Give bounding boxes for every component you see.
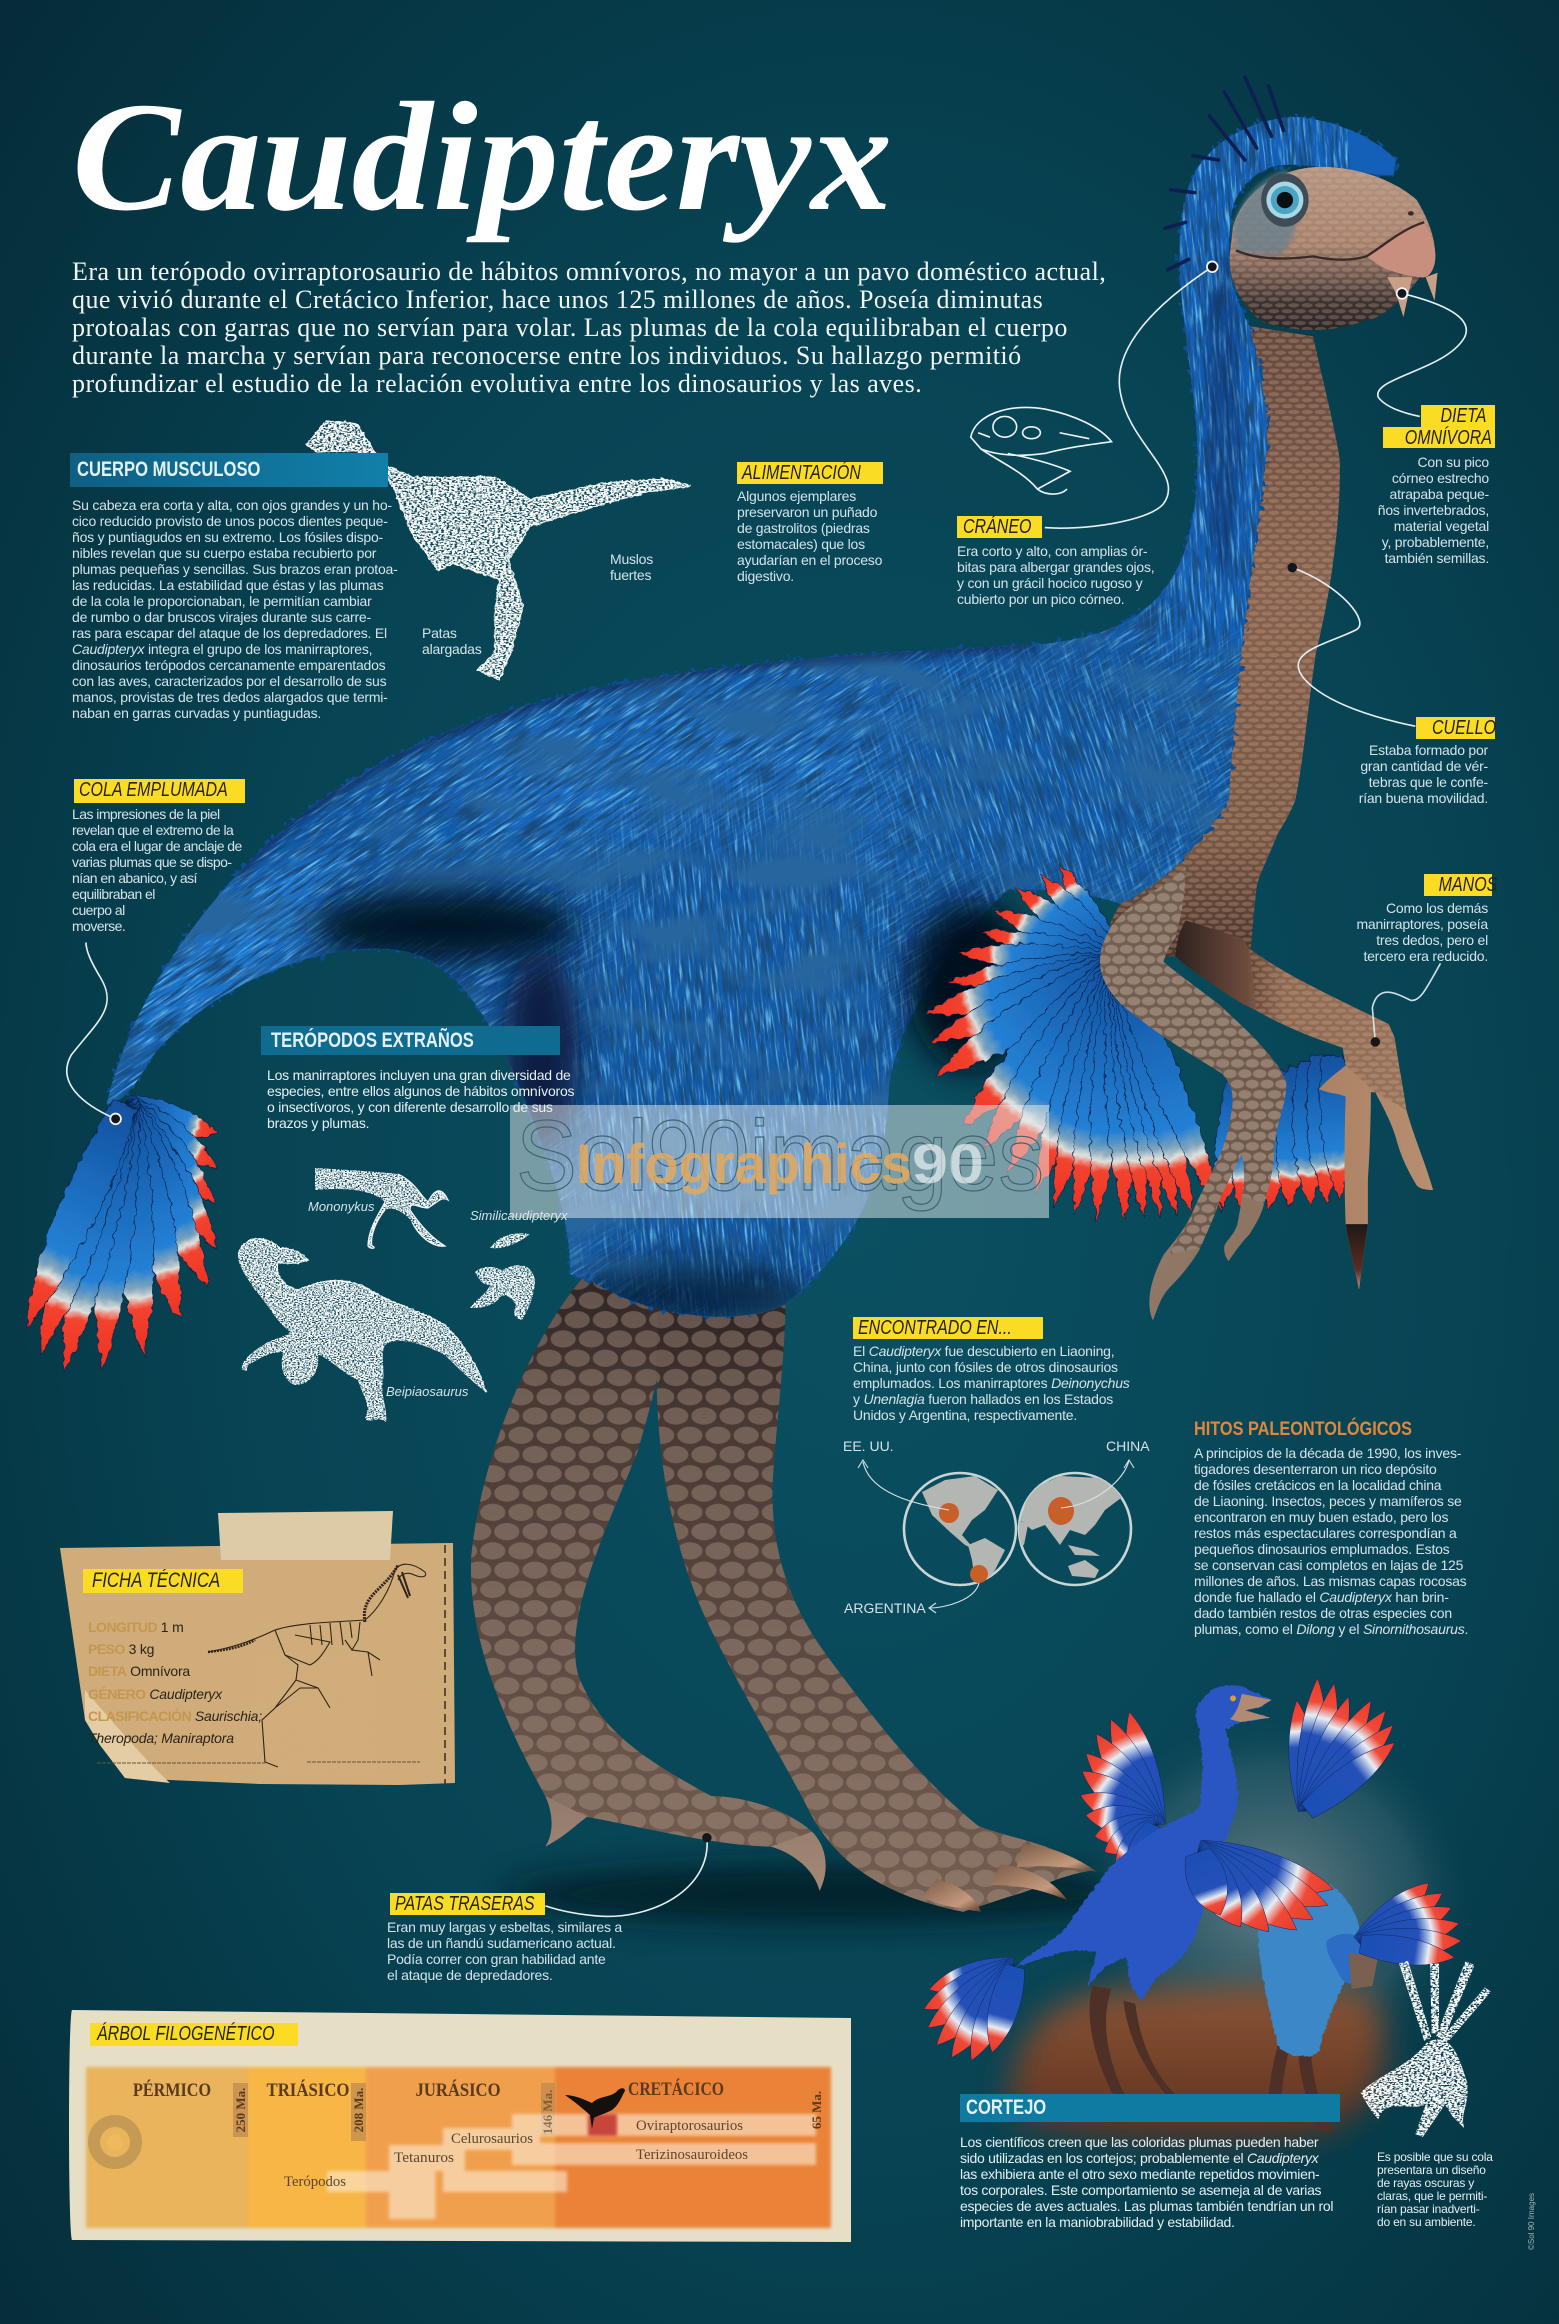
body text: Eran muy largas y esbeltas, similares a [387, 1919, 622, 1935]
label: Beipiaosaurus: Beipiaosaurus [386, 1384, 468, 1399]
body text: China, junto con fósiles de otros dinosaurios [853, 1359, 1118, 1375]
body text: brazos y plumas. [267, 1115, 369, 1131]
panel: ficha tecnica text [83, 1569, 283, 1749]
body text: cuerpo al [72, 902, 125, 918]
watermark: Infographics [576, 1132, 912, 1195]
body text: de gastrolitos (piedras [737, 520, 870, 536]
body text: emplumados. Los manirraptores Deinonychus [853, 1375, 1130, 1391]
body text: tebras que le confe- [1369, 774, 1488, 790]
body text: con las aves, caracterizados por el desarrollo de sus [72, 673, 386, 689]
panel: dieta omnivora [1378, 405, 1495, 566]
heading: DIETA [1440, 405, 1486, 427]
near wing feathers [921, 860, 1234, 1222]
body text: cola era el lugar de anclaje de [72, 838, 242, 854]
body text: las exhibiera ante el otro sexo mediante repetidos movimien- [960, 2166, 1319, 2182]
heading: HITOS PALEONTOLÓGICOS [1194, 1418, 1412, 1440]
crest feathers [1165, 77, 1283, 270]
body text: y Unenlagia fueron hallados en los Estados [853, 1391, 1113, 1407]
body text: pequeños dinosaurios emplumados. Estos [1194, 1541, 1449, 1557]
body text: gran cantidad de vér- [1360, 758, 1488, 774]
sketch: Mononykus [315, 1168, 448, 1248]
body text: de la cola le proporcionaban, le permitían cambiar [72, 593, 372, 609]
body text: atrapaba peque- [1390, 486, 1489, 502]
clade labels [284, 2118, 748, 2190]
label: patas alargadas [422, 625, 482, 657]
heading: CRÁNEO [963, 516, 1031, 538]
body text: dado también restos de otras especies con [1194, 1605, 1452, 1621]
data rows: LONGITUD 1 m [88, 1619, 184, 1635]
intro paragraph: que vivió durante el Cretácico Inferior, hace unos 125 millones de años. Poseía diminutas [72, 285, 1043, 314]
body text [1359, 742, 1488, 806]
body text: las de un ñandú sudamericano actual. [387, 1935, 616, 1951]
body text: El Caudipteryx fue descubierto en Liaoning, [853, 1343, 1114, 1359]
body text [1194, 1445, 1468, 1637]
sketch: muscular body [307, 421, 691, 680]
sketch: skull [971, 408, 1112, 494]
body text: tres dedos, pero el [1376, 932, 1488, 948]
body text: cubierto por un pico córneo. [957, 591, 1124, 607]
period labels: PÉRMICO [133, 2079, 211, 2101]
period bands [86, 2067, 831, 2228]
Ma labels: 250 Ma. [233, 2088, 248, 2132]
label: muslos fuertes [610, 551, 653, 583]
tree branches [327, 2114, 816, 2219]
body text [72, 806, 242, 934]
body text [957, 543, 1154, 607]
body text: las reducidas. La estabilidad que éstas y las plumas [72, 577, 384, 593]
caption: tail pattern [1377, 2151, 1493, 2229]
body text: dinosaurios terópodos cercanamente emparentados [72, 657, 385, 673]
intro paragraph: durante la marcha y servían para reconocerse entre los individuos. Su hallazgo permitió [72, 341, 1022, 370]
heading: PATAS TRASERAS [395, 1893, 535, 1915]
body text: importante en la maniobrabilidad y estabilidad. [960, 2214, 1235, 2230]
panel: manos [1356, 874, 1497, 964]
body text [960, 2134, 1333, 2230]
body text [737, 488, 882, 584]
blue feathered body [106, 114, 1400, 1321]
heading: TERÓPODOS EXTRAÑOS [271, 1029, 474, 1052]
data rows: DIETA Omnívora [88, 1663, 190, 1679]
heading: OMNÍVORA [1405, 427, 1492, 449]
body text: de fósiles cretácicos en la localidad china [1194, 1477, 1441, 1493]
panel: alimentacion [737, 461, 883, 584]
body text: rían buena movilidad. [1359, 790, 1488, 806]
skeleton drawing [208, 1564, 426, 1767]
heading: FICHA TÉCNICA [92, 1569, 220, 1592]
caption: tail pattern: Es posible que su cola [1377, 2150, 1493, 2164]
body text: estomacales) que los [737, 536, 865, 552]
label: Mononykus: Mononykus [308, 1199, 374, 1214]
label: EE. UU.: EE. UU. [843, 1438, 894, 1454]
body text: nían en abanico, y así [72, 870, 197, 886]
intro paragraph: profundizar el estudio de la relación evolutiva entre los dinosaurios y las aves. [72, 369, 922, 398]
label: muslos fuertes: Muslos [610, 551, 653, 567]
label: Similicaudipteryx: Similicaudipteryx [470, 1208, 568, 1223]
body text: Podía correr con gran habilidad ante [387, 1951, 606, 1967]
period labels: CRETÁCICO [628, 2078, 724, 2100]
panel: patas traseras [390, 1893, 630, 1989]
period labels: TRIÁSICO [266, 2079, 350, 2101]
body text: tos corporales. Este comportamiento se asemeja al de varias [960, 2182, 1321, 2198]
sketch: Beipiaosaurus [238, 1239, 486, 1422]
heading: CORTEJO [966, 2096, 1046, 2119]
body text: sido utilizadas en los cortejos; probablemente el Caudipteryx [960, 2150, 1318, 2166]
near hind leg [657, 1304, 1097, 1912]
caption: tail pattern: do en su ambiente. [1377, 2215, 1475, 2229]
body text: material vegetal [1394, 518, 1489, 534]
body text: tercero era reducido. [1363, 948, 1488, 964]
caption: tail pattern: de rayas oscuras y [1377, 2176, 1474, 2190]
heading: ALIMENTACIÓN [742, 462, 861, 484]
data rows: Theropoda; Maniraptora [88, 1730, 234, 1746]
caption: tail pattern: presentara un diseño [1377, 2163, 1486, 2177]
period labels: JURÁSICO [416, 2079, 500, 2101]
clade labels: Oviraptorosaurios [636, 2118, 743, 2134]
silhouette [565, 2088, 625, 2129]
label: Argentina: ARGENTINA [844, 1600, 926, 1616]
label: China: CHINA [1106, 1438, 1150, 1454]
Ma labels: 208 Ma. [351, 2088, 366, 2132]
heading [70, 453, 388, 487]
body text [267, 1067, 574, 1131]
clade labels: Celurosaurios [451, 2131, 533, 2147]
small courtship scene [917, 1677, 1475, 2139]
far hind leg [471, 1275, 826, 1891]
body text: Como los demás [1386, 900, 1488, 916]
title: Caudipteryx [72, 70, 892, 243]
heading: MANOS [1439, 874, 1497, 896]
body text: millones de años. Las mismas capas rocosas [1194, 1573, 1466, 1589]
sketch: Similicaudipteryx [470, 1233, 535, 1320]
heading: arbol filogenetico: ÁRBOL FILOGENÉTICO [97, 2023, 275, 2045]
body text: y, probablemente, [1382, 534, 1489, 550]
body text [853, 1343, 1130, 1423]
heading: ENCONTRADO EN... [858, 1317, 1012, 1339]
body text: plumas, como el Dilong y el Sinornithosaurus. [1194, 1621, 1468, 1637]
body text: A principios de la década de 1990, los inves- [1194, 1445, 1461, 1461]
body text: de Liaoning. Insectos, peces y mamíferos se [1194, 1493, 1462, 1509]
panel: cola emplumada [72, 779, 245, 934]
body text: cico reducido provisto de unos pocos dientes peque- [72, 513, 388, 529]
caption: tail pattern: rían pasar inadverti- [1377, 2202, 1480, 2216]
body text: Su cabeza era corta y alta, con ojos grandes y un ho- [72, 497, 392, 513]
body text: ños invertebrados, [1378, 502, 1489, 518]
far arm feathers [1206, 1054, 1354, 1212]
body text: también semillas. [1385, 550, 1489, 566]
panel: craneo [957, 515, 1154, 607]
data rows: CLASIFICACIÓN Saurischia; [88, 1708, 262, 1724]
heading: CUERPO MUSCULOSO [77, 458, 260, 481]
body text: de rumbo o dar bruscos virajes durante sus carre- [72, 609, 371, 625]
body text: manirraptores, poseía [1356, 916, 1488, 932]
data rows: GÉNERO Caudipteryx [88, 1686, 222, 1702]
body text: Algunos ejemplares [737, 488, 856, 504]
head [1230, 167, 1438, 330]
body text: bitas para albergar grandes ojos, [957, 559, 1154, 575]
body text: Era corto y alto, con amplias ór- [957, 543, 1147, 559]
intro paragraph [72, 257, 1106, 398]
body text: restos más espectaculares correspondían a [1194, 1525, 1457, 1541]
data rows: PESO 3 kg [88, 1641, 154, 1657]
credit: ©Sol 90 Images [1527, 2193, 1536, 2250]
body text [72, 497, 398, 721]
body text: Las impresiones de la piel [72, 806, 220, 822]
heading [261, 1026, 560, 1055]
body text: Con su pico [1417, 454, 1489, 470]
label: patas alargadas: alargadas [422, 641, 482, 657]
Ma labels [233, 2088, 824, 2134]
heading [960, 2094, 1340, 2122]
data rows [88, 1616, 262, 1749]
clade labels: Terópodos [284, 2174, 346, 2190]
body text: Unidos y Argentina, respectivamente. [853, 1407, 1077, 1423]
heading: COLA EMPLUMADA [79, 779, 228, 801]
body text: el ataque de depredadores. [387, 1967, 553, 1983]
Ma labels: 65 Ma. [809, 2091, 824, 2129]
wing shadow [908, 900, 1033, 1071]
body text: manos, provistas de tres dedos alargados que termi- [72, 689, 388, 705]
watermark: 90 [912, 1132, 984, 1195]
clade labels: Terizinosauroideos [636, 2147, 748, 2163]
Ma labels: 146 Ma. [540, 2090, 555, 2134]
tail sketch [1360, 1961, 1491, 2137]
body text: ños y puntiagudos en su extremo. Los fósiles dispo- [72, 529, 383, 545]
panel: teropodos extraños [261, 1026, 574, 1131]
body text: ayudarían en el proceso [737, 552, 882, 568]
body text: equilibraban el [72, 886, 155, 902]
body text: ras para escapar del ataque de los depredadores. El [72, 625, 387, 641]
body text: revelan que el extremo de la [72, 822, 233, 838]
clade labels: Tetanuros [394, 2150, 454, 2166]
intro paragraph: protoalas con garras que no servían para volar. Las plumas de la cola equilibraban el cuerpo [72, 313, 1068, 342]
body text: y con un grácil hocico rugoso y [957, 575, 1142, 591]
watermark: Sol90images [516, 1100, 1044, 1212]
panel: hitos paleontologicos [1194, 1418, 1494, 1638]
body text: preservaron un puñado [737, 504, 877, 520]
body text: donde fue hallado el Caudipteryx han brin- [1194, 1589, 1449, 1605]
panel: cuello [1359, 717, 1496, 806]
ficha tecnica paper [60, 1511, 455, 1785]
heading [1383, 405, 1495, 449]
body text: plumas pequeñas y sencillas. Sus brazos eran protoa- [72, 561, 398, 577]
body text: varias plumas que se dispo- [72, 854, 231, 870]
body text [1378, 454, 1489, 566]
panel: cortejo [960, 2094, 1360, 2234]
body text: Los manirraptores incluyen una gran diversidad de [267, 1067, 571, 1083]
body text: naban en garras curvadas y puntiagudas. [72, 705, 321, 721]
far arm and hand [1175, 920, 1433, 1289]
body text [387, 1919, 622, 1983]
tail feather fan [8, 1090, 231, 1376]
body text: se conservan casi completos en lajas de 125 [1194, 1557, 1463, 1573]
body text: nibles revelan que su cuerpo estaba recubierto por [72, 545, 376, 561]
caption: tail pattern: claras, que le permiti- [1377, 2189, 1487, 2203]
label: muslos fuertes: fuertes [610, 567, 651, 583]
body text: Caudipteryx integra el grupo de los manirraptores, [72, 641, 372, 657]
panel: cuerpo musculoso [70, 453, 398, 721]
body text: especies de aves actuales. Las plumas también tendrían un rol [960, 2198, 1333, 2214]
near arm and claws [1100, 867, 1286, 1320]
body text: tigadores desenterraron un rico depósito [1194, 1461, 1437, 1477]
body text [1356, 900, 1488, 964]
world maps [858, 1460, 1134, 1613]
body text: o insectívoros, y con diferente desarrollo de sus [267, 1099, 553, 1115]
body text: encontraron en muy buen estado, pero los [1194, 1509, 1448, 1525]
label: patas alargadas: Patas [422, 625, 457, 641]
body text: moverse. [72, 918, 125, 934]
body text: especies, entre ellos algunos de hábitos omnívoros [267, 1083, 574, 1099]
intro paragraph: Era un terópodo ovirraptorosaurio de hábitos omnívoros, no mayor a un pavo doméstico actual, [72, 257, 1106, 286]
neck and chest skin [1103, 326, 1340, 963]
body text: córneo estrecho [1392, 470, 1489, 486]
body text: Los científicos creen que las coloridas plumas pueden haber [960, 2134, 1318, 2150]
phylogenetic tree panel [69, 2010, 851, 2242]
panel: encontrado en [853, 1317, 1153, 1429]
heading: CUELLO [1432, 717, 1496, 739]
period labels [133, 2078, 724, 2101]
callout leader lines [67, 261, 1466, 1916]
body text: digestivo. [737, 568, 794, 584]
body text: Estaba formado por [1369, 742, 1488, 758]
